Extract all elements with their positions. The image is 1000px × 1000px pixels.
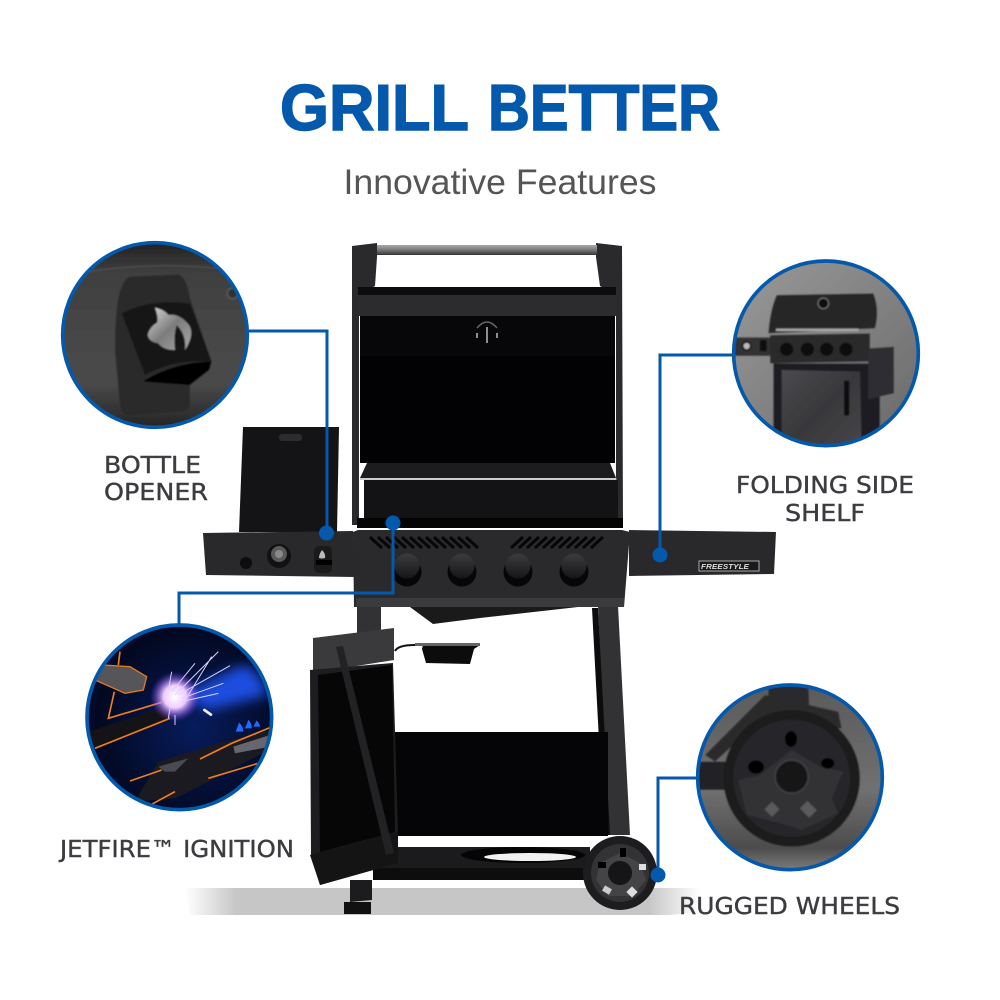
mini grill lid [768,293,877,333]
label: folding side shelf: FOLDING SIDE [736,473,914,499]
wheel holes [748,731,834,774]
label: folding side shelf: SHELF [785,501,865,527]
side burner lid [239,427,339,532]
label: folding side shelf [736,473,914,527]
back panel [392,732,608,836]
mini side shelf [730,337,770,356]
panel: bottle opener photo [60,240,250,430]
spark glow [150,672,200,722]
mini door [782,370,862,450]
orange edge lines [95,652,170,748]
small blue flames [236,720,260,732]
burner tube [135,730,272,802]
cart left leg [357,606,381,650]
label: rugged wheels: RUGGED WHEELS [679,894,900,920]
leader: jetfire ignition [179,522,393,624]
wheel tyre [723,710,860,847]
front strip [357,518,623,528]
handle bar [377,245,597,255]
mini door handle [844,381,849,416]
mini folded shelf [868,347,894,399]
igniter body [95,665,147,693]
burner tray under panel [410,607,578,624]
freestyle badge: FREESTYLE [701,562,750,571]
bottle opener [314,546,332,573]
lid interior [360,316,615,463]
opener mouth [143,362,212,385]
panel: jetfire ignition photo [83,622,277,815]
leader: bottle opener [248,331,327,533]
foot [344,880,372,914]
control knobs [392,554,588,586]
label: jetfire ignition: JETFIRE™ IGNITION [58,837,294,863]
left side shelf [203,531,355,577]
subtitle: Innovative Features [344,163,656,202]
lid interior upper band [360,316,615,356]
door [310,628,398,885]
opener plate [115,274,212,415]
leader: rugged wheels [658,778,697,875]
mini opener [760,340,767,351]
leader: folding side shelf [660,355,733,555]
lid frame right [596,243,623,525]
control panel [353,530,630,607]
bottom shelf [373,847,590,880]
side burner knob [267,544,291,568]
spark ember [203,708,212,716]
right side shelf [629,530,776,576]
burner plate [158,758,188,772]
panel: rugged wheels photo [695,683,888,877]
leader dot: folding side shelf [652,548,668,562]
mini panel [770,333,870,363]
blue flame plume [182,666,268,710]
leader dot: jetfire ignition [386,516,400,530]
rear strap [592,608,610,835]
leader dot: rugged wheels [650,868,666,882]
wheel hub face [733,720,850,837]
freestyle badge [699,561,759,571]
title [280,71,720,144]
side burner lid tab [279,434,302,441]
lower deck [360,463,616,478]
mini knobs [780,343,853,356]
lid inner band [359,295,616,316]
opener face [122,302,212,375]
flame logo [148,308,191,350]
wheel bracket shade [705,695,842,762]
vent slots [370,537,603,548]
leader dot: bottle opener [319,526,334,540]
igniter tube [88,707,172,748]
grill [203,243,776,914]
panel: folding side shelf photo [730,258,923,452]
mini side knob [743,342,751,350]
panel bottom edge [356,598,624,607]
wheel star [738,750,843,830]
mini handle [776,329,859,331]
firebox [364,480,618,518]
igniter button [240,557,252,569]
wheel tiles [764,801,817,818]
title: BETTER [488,71,720,144]
post behind wheel [768,686,810,706]
grease tray [395,643,480,664]
burner highlights [233,735,270,753]
label: bottle opener: BOTTLE [104,453,201,479]
label: bottle opener: OPENER [104,480,208,506]
wheel [583,836,657,910]
title: GRILL [280,71,469,144]
frame behind wheel [700,760,726,790]
label: bottle opener [104,453,208,506]
mini cart [772,362,881,437]
floor shadow [185,888,700,915]
thermometer [477,322,497,343]
mini lid gauge [818,298,829,309]
wheel cap [775,760,808,793]
lid frame left [352,243,377,525]
lid strip [358,287,616,295]
burner orange lines [130,728,270,804]
warming rack line [360,478,617,480]
cart right leg [598,606,630,835]
sparks [168,652,230,725]
